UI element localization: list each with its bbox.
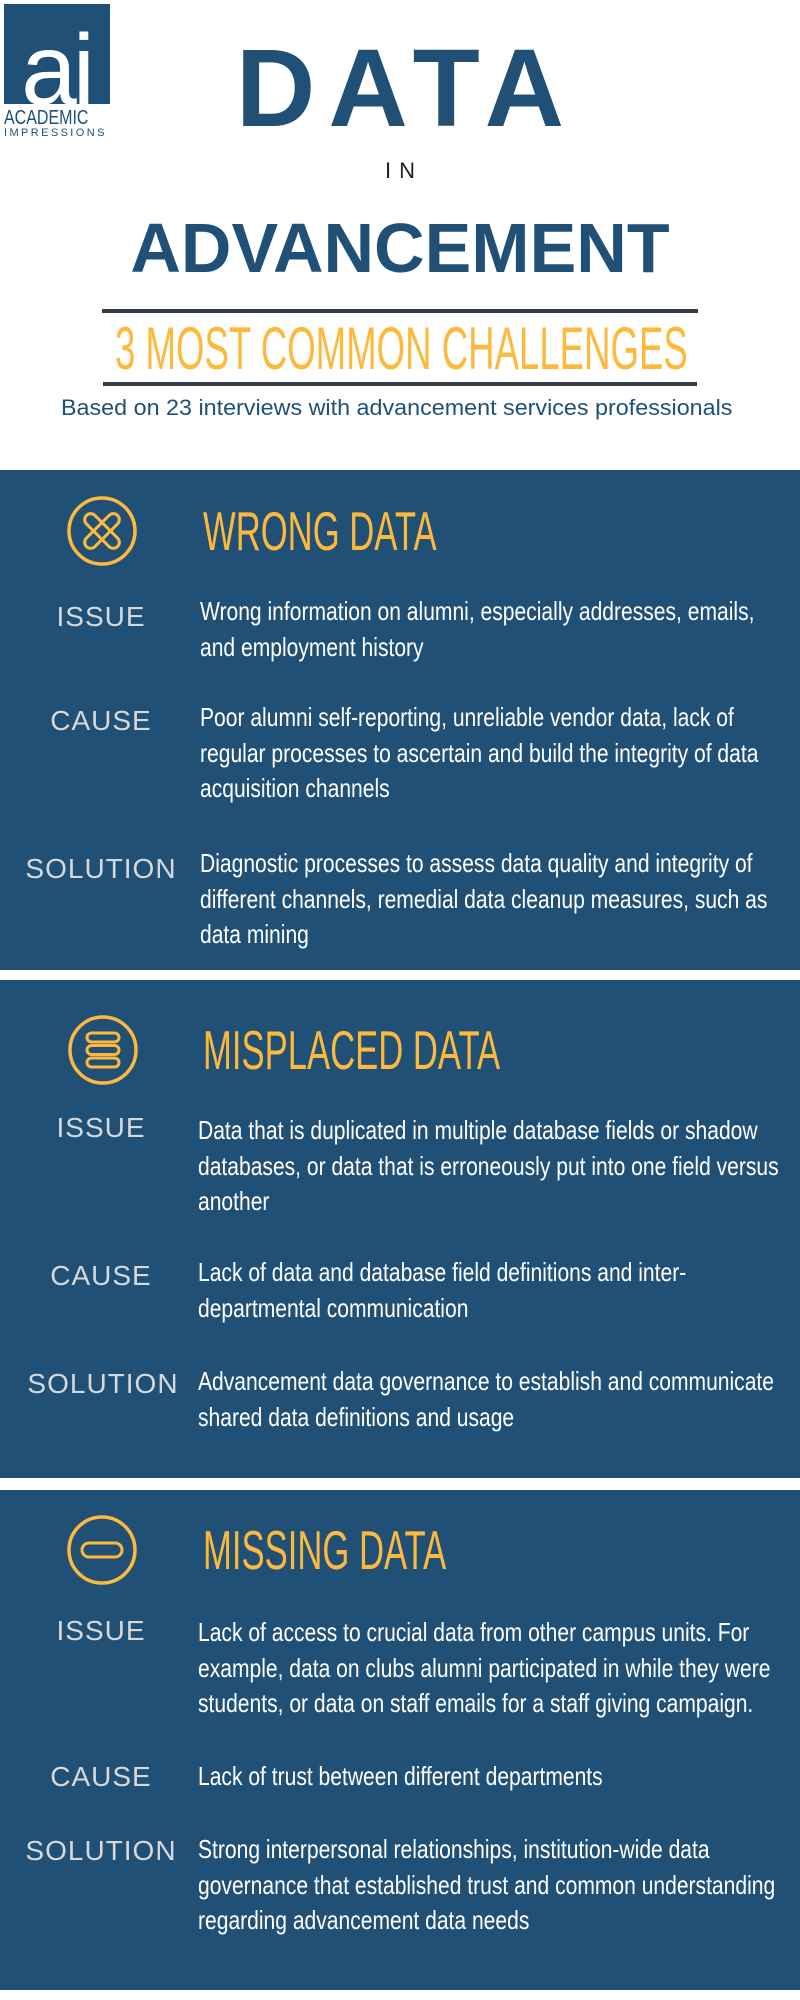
heading: MISSING DATA xyxy=(203,1519,446,1581)
icon: x circle xyxy=(67,496,137,566)
source note: Based on 23 interviews with advancement services professionals xyxy=(61,395,732,420)
text: solution xyxy=(198,1366,774,1432)
icon: minus xyxy=(67,1515,137,1585)
text: cause: departmental communication xyxy=(198,1292,468,1322)
text: solution: Diagnostic processes to assess data quality and integrity of xyxy=(200,848,753,878)
label: cause: CAUSE xyxy=(50,1260,152,1291)
logo wordmark: ACADEMIC xyxy=(4,107,88,129)
text: cause: Lack of trust between different departments xyxy=(198,1761,603,1791)
logo xyxy=(4,4,110,139)
text: cause: acquisition channels xyxy=(200,773,390,803)
subtitle: 3 most common challenges: 3 MOST COMMON CHALLENGES xyxy=(115,315,688,382)
text: cause: Poor alumni self-reporting, unreliable vendor data, lack of xyxy=(200,702,734,732)
panel: wrong data xyxy=(0,470,800,970)
title: ADVANCEMENT: ADVANCEMENT xyxy=(130,209,670,287)
text: cause: Lack of data and database field definitions and inter- xyxy=(198,1257,686,1287)
text: issue: and employment history xyxy=(200,632,424,662)
logo: IMPRESSIONS xyxy=(4,127,107,139)
text: solution: regarding advancement data needs xyxy=(198,1905,529,1935)
text: issue: another xyxy=(198,1186,269,1216)
text: issue: example, data on clubs alumni participated in while they were xyxy=(198,1652,770,1682)
title: IN: IN xyxy=(385,158,423,183)
text: issue: databases, or data that is erroneously put into one field versus xyxy=(198,1150,779,1180)
icon: stacked bars xyxy=(68,1015,138,1085)
label: solution: SOLUTION xyxy=(27,1368,179,1399)
panel: misplaced data xyxy=(0,980,800,1478)
text: solution: shared data definitions and usage xyxy=(198,1402,514,1432)
logo mark xyxy=(4,4,110,104)
text: issue xyxy=(198,1617,770,1718)
heading: MISPLACED DATA xyxy=(203,1019,500,1081)
text: issue: Wrong information on alumni, especially addresses, emails, xyxy=(200,596,754,626)
label: cause: CAUSE xyxy=(50,705,152,736)
text: issue: Data that is duplicated in multiple database fields or shadow xyxy=(198,1115,758,1145)
label: issue: ISSUE xyxy=(56,1112,146,1143)
text: solution xyxy=(200,848,767,949)
text: solution: Strong interpersonal relationships, institution-wide data xyxy=(198,1834,710,1864)
text: solution: data mining xyxy=(200,919,309,949)
label: solution: SOLUTION xyxy=(25,853,177,884)
text: solution: governance that established trust and common understanding xyxy=(198,1870,775,1900)
text: solution: Advancement data governance to establish and communicate xyxy=(198,1366,774,1396)
panel: missing data xyxy=(0,1490,800,1990)
text: cause xyxy=(198,1257,686,1322)
text: issue: students, or data on staff emails for a staff giving campaign. xyxy=(198,1688,753,1718)
label: issue: ISSUE xyxy=(56,601,146,632)
label: cause: CAUSE xyxy=(50,1761,152,1792)
text: solution: different channels, remedial data cleanup measures, such as xyxy=(200,884,767,914)
title: DATA: DATA xyxy=(236,27,577,150)
text: solution xyxy=(198,1834,775,1935)
label: issue: ISSUE xyxy=(56,1615,146,1646)
text: cause xyxy=(200,702,758,803)
text: issue: Lack of access to crucial data from other campus units. For xyxy=(198,1617,749,1647)
text: issue xyxy=(198,1115,779,1216)
text: issue xyxy=(200,596,754,662)
heading: WRONG DATA xyxy=(203,500,437,562)
label: solution: SOLUTION xyxy=(25,1835,177,1866)
text: cause: regular processes to ascertain and build the integrity of data xyxy=(200,738,758,768)
